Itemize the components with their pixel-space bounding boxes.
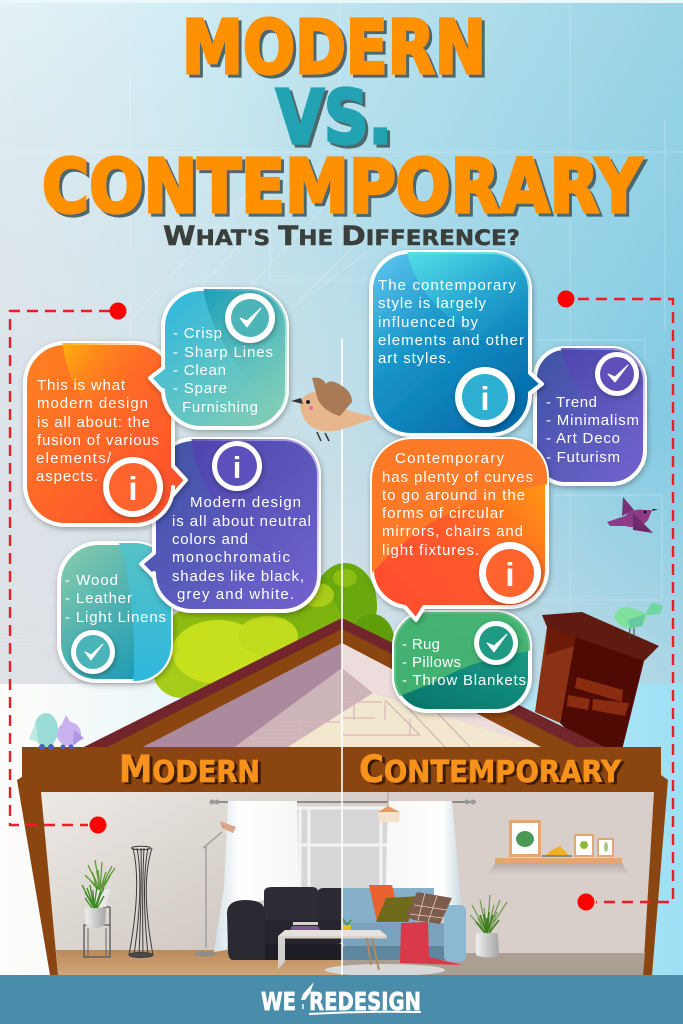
bubble: wood list: - Light Linens	[65, 609, 166, 626]
heading: Contemporary: CONTEMPORARY	[359, 748, 622, 791]
bubble: influences: The contemporary	[378, 277, 516, 294]
footer band	[0, 975, 683, 1024]
logo: WE	[261, 987, 296, 1016]
bubble: throw blankets list	[390, 610, 535, 711]
roof gable	[143, 640, 542, 747]
bubble: trend list: - Futurism	[546, 449, 620, 466]
bubble: crisp list: Furnishing	[182, 399, 258, 416]
brown bird	[291, 378, 376, 441]
bubble: fusion: is all about: the	[37, 414, 150, 431]
wire vase	[129, 846, 153, 958]
dashed connector left	[10, 302, 126, 834]
bubble: neutral colors: shades like black,	[172, 568, 304, 585]
bubble: throw blankets list: - Throw Blankets	[402, 672, 526, 689]
title: VS.	[276, 75, 392, 161]
bubble: crisp list: - Crisp	[173, 325, 222, 342]
icon: check	[71, 630, 115, 674]
owls on the roof	[29, 713, 84, 750]
coffee table and rug	[278, 919, 445, 976]
bubble: wood list: - Wood	[65, 572, 118, 589]
bubble: influences: influenced by	[378, 314, 478, 331]
bubble: trend list: - Art Deco	[546, 430, 620, 447]
right plant	[470, 895, 507, 958]
bubble: neutral colors: grey and white.	[177, 586, 294, 603]
title	[42, 5, 643, 230]
chimney	[535, 612, 659, 750]
bubble: throw blankets list: - Pillows	[402, 654, 461, 671]
bubble: curves: Contemporary	[395, 450, 504, 467]
icon: info	[455, 367, 515, 427]
bubble: crisp list: - Clean	[173, 362, 226, 379]
bubble: influences	[371, 250, 542, 435]
dashed connector right	[558, 290, 673, 910]
curtains	[214, 801, 462, 952]
purple bird	[607, 497, 658, 533]
title: MODERN	[182, 5, 486, 91]
bubble: crisp list: - Sharp Lines	[173, 344, 273, 361]
green bird	[614, 602, 663, 638]
bubble: fusion	[25, 340, 186, 525]
bubble: neutral colors: Modern design	[190, 494, 301, 511]
icon: info	[479, 542, 541, 604]
bubble: influences: style is largely	[378, 295, 486, 312]
icon: info	[103, 457, 163, 517]
bubble: crisp list: - Spare	[173, 380, 227, 397]
bubble: fusion: This is what	[37, 377, 126, 394]
bubble: neutral colors: is all about neutral	[172, 513, 311, 530]
bubble: curves: forms of circular	[382, 505, 504, 522]
floor lamp	[194, 821, 236, 956]
icon: info: i	[505, 556, 515, 593]
icon: info: i	[128, 470, 138, 507]
house walls and interior	[17, 747, 668, 975]
icon: info: i	[233, 450, 241, 485]
bubble: fusion: modern design	[37, 395, 148, 412]
black sofa	[227, 887, 342, 960]
bubble: neutral colors	[141, 435, 325, 611]
icon: check	[595, 352, 639, 396]
pendant lamp	[378, 792, 400, 822]
bubble: crisp list	[150, 285, 290, 428]
bubble: fusion: elements/	[36, 450, 112, 467]
bubble: throw blankets list: - Rug	[402, 636, 440, 653]
bubble: neutral colors: colors and	[172, 531, 248, 548]
bubble: wood list: - Leather	[65, 590, 132, 607]
bubble: fusion: aspects.	[36, 468, 98, 485]
icon: info	[212, 441, 262, 491]
bubble: trend list: - Minimalism	[546, 412, 639, 429]
bubble: wood list	[59, 540, 180, 690]
bubble: curves: has plenty of curves	[382, 469, 533, 486]
subtitle: WHAT'S THE DIFFERENCE?	[163, 221, 520, 252]
bubble: curves: light fixtures.	[382, 542, 479, 559]
bush behind roof	[152, 563, 394, 700]
blue sofa	[342, 885, 466, 965]
window	[210, 800, 476, 926]
bubble: influences: art styles.	[378, 350, 451, 367]
logo	[261, 982, 421, 1016]
bubble: curves	[370, 437, 550, 620]
plant stands	[82, 860, 115, 957]
centre divider	[341, 339, 343, 975]
icon: info: i	[480, 380, 490, 417]
bubble: trend list	[535, 345, 650, 484]
bubble: influences: elements and other	[378, 332, 524, 349]
heading: Modern: MODERN	[119, 748, 260, 791]
logo: REDESIGN	[309, 987, 421, 1016]
wall shelf and frames	[487, 820, 630, 875]
icon: check	[474, 621, 518, 665]
bubble: fusion: fusion of various	[37, 432, 159, 449]
bubble: curves: mirrors, chairs and	[382, 523, 523, 540]
bubble: neutral colors: monochromatic	[172, 549, 290, 566]
icon: check	[225, 293, 275, 343]
bubble: trend list: - Trend	[546, 394, 597, 411]
roof edges	[84, 618, 604, 747]
bubble: curves: to go around in the	[382, 487, 525, 504]
